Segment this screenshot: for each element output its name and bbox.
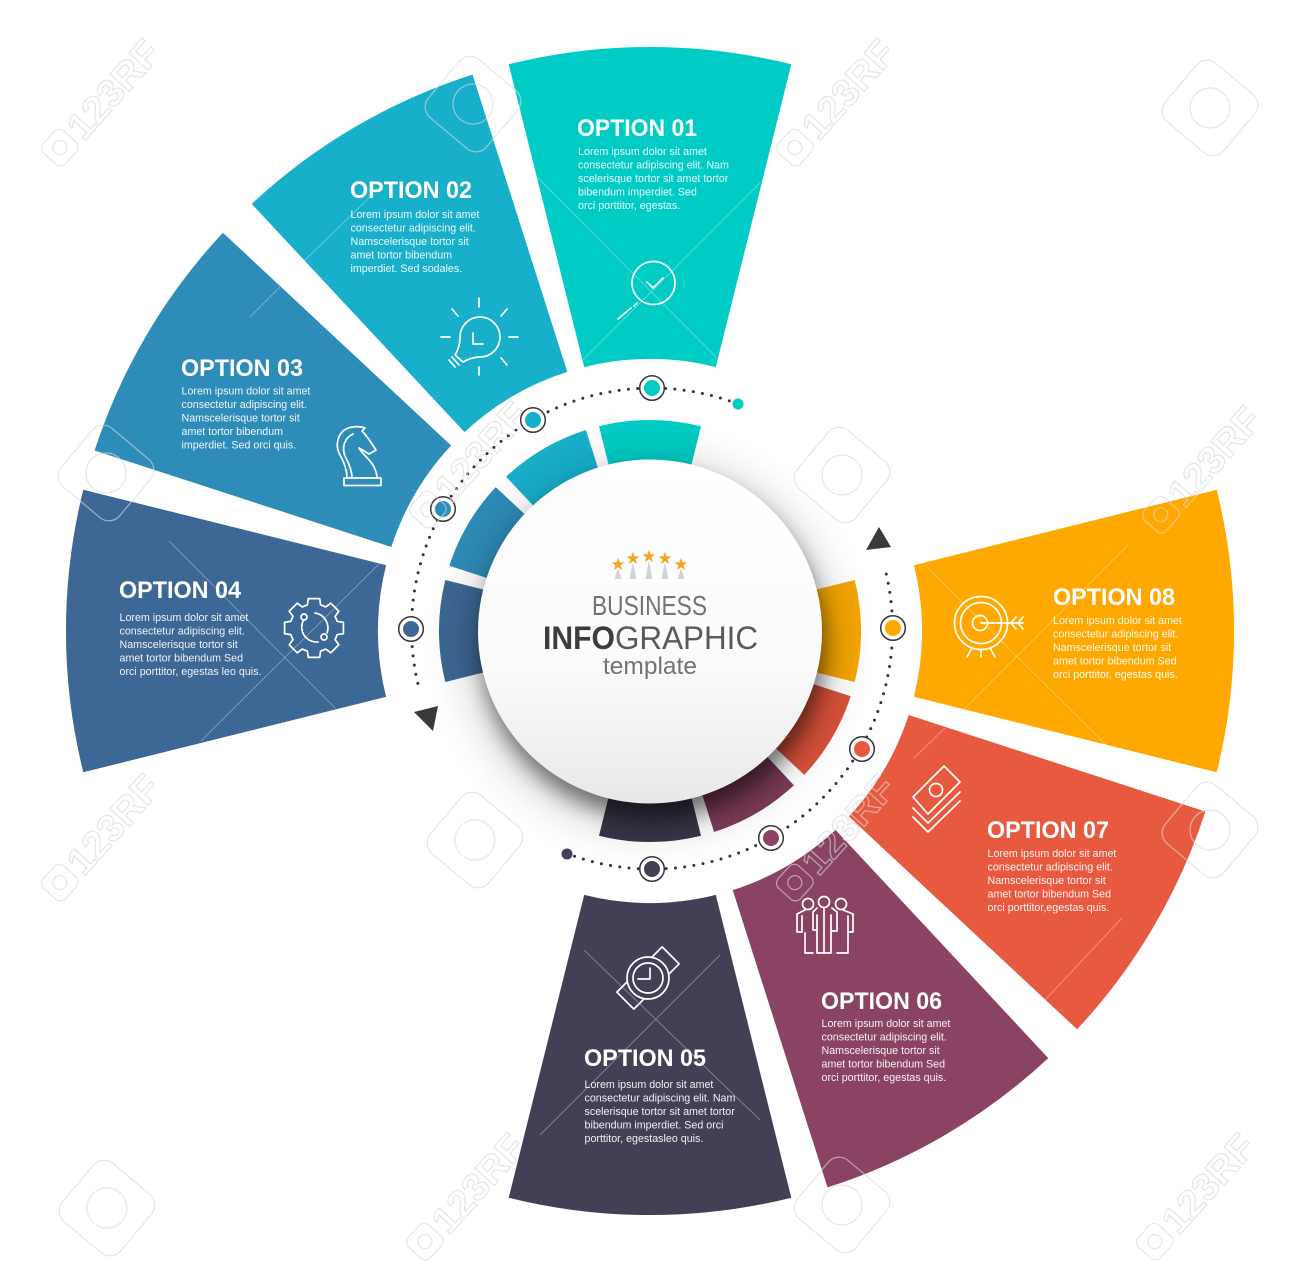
text: option 02 body: imperdiet. Sed sodales. <box>350 263 462 275</box>
text: option 07 body: amet tortor bibendum Sed <box>988 888 1111 900</box>
watermark stamps: 123RF <box>794 32 904 148</box>
dotted progress ring <box>412 388 893 869</box>
title: infographic: INFO <box>543 620 615 656</box>
text: option 01 body: orci porttitor, egestas. <box>578 200 680 212</box>
icon: five stars: ★ <box>641 547 657 566</box>
heading: option 06: OPTION 06 <box>821 988 942 1015</box>
text: option 06 body: consectetur adipiscing elit. <box>822 1032 947 1044</box>
text: option 07 body: Namscelerisque tortor sit <box>988 875 1106 887</box>
text: option 07 body: Lorem ipsum dolor sit amet <box>988 848 1116 860</box>
watermark stamps: 123RF <box>794 767 904 883</box>
text: option 04 body: consectetur adipiscing elit. <box>120 626 245 638</box>
text: option 06 body: Lorem ipsum dolor sit amet <box>822 1018 950 1030</box>
text: option 04 body: orci porttitor, egestas leo quis. <box>120 666 261 678</box>
heading: option 07: OPTION 07 <box>987 817 1109 844</box>
icon: target with arrow <box>954 596 1023 657</box>
icon: five stars: ★ <box>673 555 689 574</box>
text: option 03 body: amet tortor bibendum <box>182 426 283 438</box>
text: option 08 body: Namscelerisque tortor sit <box>1053 642 1171 654</box>
watermark stamps: 123RF <box>59 767 169 883</box>
text: option 06 body: orci porttitor, egestas quis. <box>822 1072 946 1084</box>
text: option 05 body: bibendum imperdiet. Sed orci <box>584 1120 724 1132</box>
icon: magnifier with check <box>618 262 675 319</box>
text: option 06 body: Namscelerisque tortor sit <box>822 1045 940 1057</box>
watermark stamps: 123RF <box>424 1126 534 1242</box>
panel: option 05 <box>509 895 791 1215</box>
text: option 02 body: Lorem ipsum dolor sit amet <box>350 209 479 221</box>
text: option 07 body: consectetur adipiscing elit. <box>988 862 1113 874</box>
watermark stamps: 123RF <box>1160 399 1270 515</box>
text: option 03 body: consectetur adipiscing elit. <box>182 399 307 411</box>
heading: option 04: OPTION 04 <box>119 577 242 604</box>
panel: option 01 <box>509 47 791 367</box>
watermark stamps: 123RF <box>427 394 537 510</box>
text: option 08 body: orci porttitor, egestas quis. <box>1053 669 1178 681</box>
heading: option 03: OPTION 03 <box>181 355 303 382</box>
icon: five stars <box>610 547 689 579</box>
icon: five stars: ★ <box>610 555 626 574</box>
text: option 08 body: amet tortor bibendum Sed <box>1053 656 1177 668</box>
watermark stamps: 123RF <box>1154 1126 1264 1242</box>
text: option 04 body: Lorem ipsum dolor sit amet <box>120 612 248 624</box>
text: option 05 body: consectetur adipiscing elit. Nam <box>584 1092 735 1104</box>
icon: five stars: ★ <box>625 549 641 568</box>
text: option 06 body: amet tortor bibendum Sed <box>822 1058 945 1070</box>
text: option 05 body: porttitor, egestasleo quis. <box>584 1133 703 1145</box>
text: option 02 body: amet tortor bibendum <box>350 250 452 262</box>
icon: chess knight <box>337 427 381 486</box>
text: option 04 body: Namscelerisque tortor sit <box>120 639 238 651</box>
arrow: top right <box>866 527 891 550</box>
text: option 07 body: orci porttitor,egestas quis. <box>988 902 1109 914</box>
heading: option 02: OPTION 02 <box>350 177 472 204</box>
text: option 03 body: Lorem ipsum dolor sit amet <box>182 386 310 398</box>
icon: stack of money <box>913 766 960 832</box>
text: option 02 body: Namscelerisque tortor sit <box>350 236 469 248</box>
title: business: BUSINESS <box>592 590 707 621</box>
title: infographic: GRAPHIC <box>615 620 758 656</box>
heading: option 01: OPTION 01 <box>577 115 697 142</box>
heading: option 05: OPTION 05 <box>584 1045 706 1072</box>
panel: option 04 <box>66 490 386 772</box>
heading: option 08: OPTION 08 <box>1053 584 1175 611</box>
panel: option 03 <box>95 233 451 547</box>
text: option 05 body: scelerisque tortor sit amet tortor <box>584 1106 735 1118</box>
text: option 08 body: Lorem ipsum dolor sit amet <box>1053 615 1182 627</box>
text: option 08 body: consectetur adipiscing elit. <box>1053 628 1178 640</box>
text: option 01 body: bibendum imperdiet. Sed <box>578 186 697 198</box>
text: option 01 body: consectetur adipiscing elit. Nam <box>578 160 729 172</box>
text: option 01 body: Lorem ipsum dolor sit amet <box>578 146 707 158</box>
panel: option 08 <box>914 490 1234 772</box>
text: option 01 body: scelerisque tortor sit amet tortor <box>578 173 729 185</box>
panel: option 06 <box>733 830 1048 1187</box>
icon: group of people <box>797 896 853 953</box>
arrow: bottom left <box>414 706 438 731</box>
inner ring segments <box>439 420 861 842</box>
text: option 05 body: Lorem ipsum dolor sit amet <box>584 1079 713 1091</box>
text: option 04 body: amet tortor bibendum Sed <box>120 652 243 664</box>
icon: gear <box>285 599 343 657</box>
text: option 03 body: imperdiet. Sed orci quis. <box>182 440 296 452</box>
panel: option 02 <box>252 75 567 432</box>
center circle with shadow <box>464 458 836 830</box>
subtitle: template: template <box>603 653 697 680</box>
text: option 02 body: consectetur adipiscing elit. <box>350 222 476 234</box>
icon: light bulb with clock <box>441 298 518 375</box>
watermark stamps: 123RF <box>59 32 169 148</box>
panel: option 07 <box>849 715 1205 1029</box>
icon: wrist watch <box>617 947 679 1009</box>
text: option 03 body: Namscelerisque tortor sit <box>182 412 300 424</box>
icon: five stars: ★ <box>657 549 673 568</box>
timeline nodes <box>399 376 905 881</box>
